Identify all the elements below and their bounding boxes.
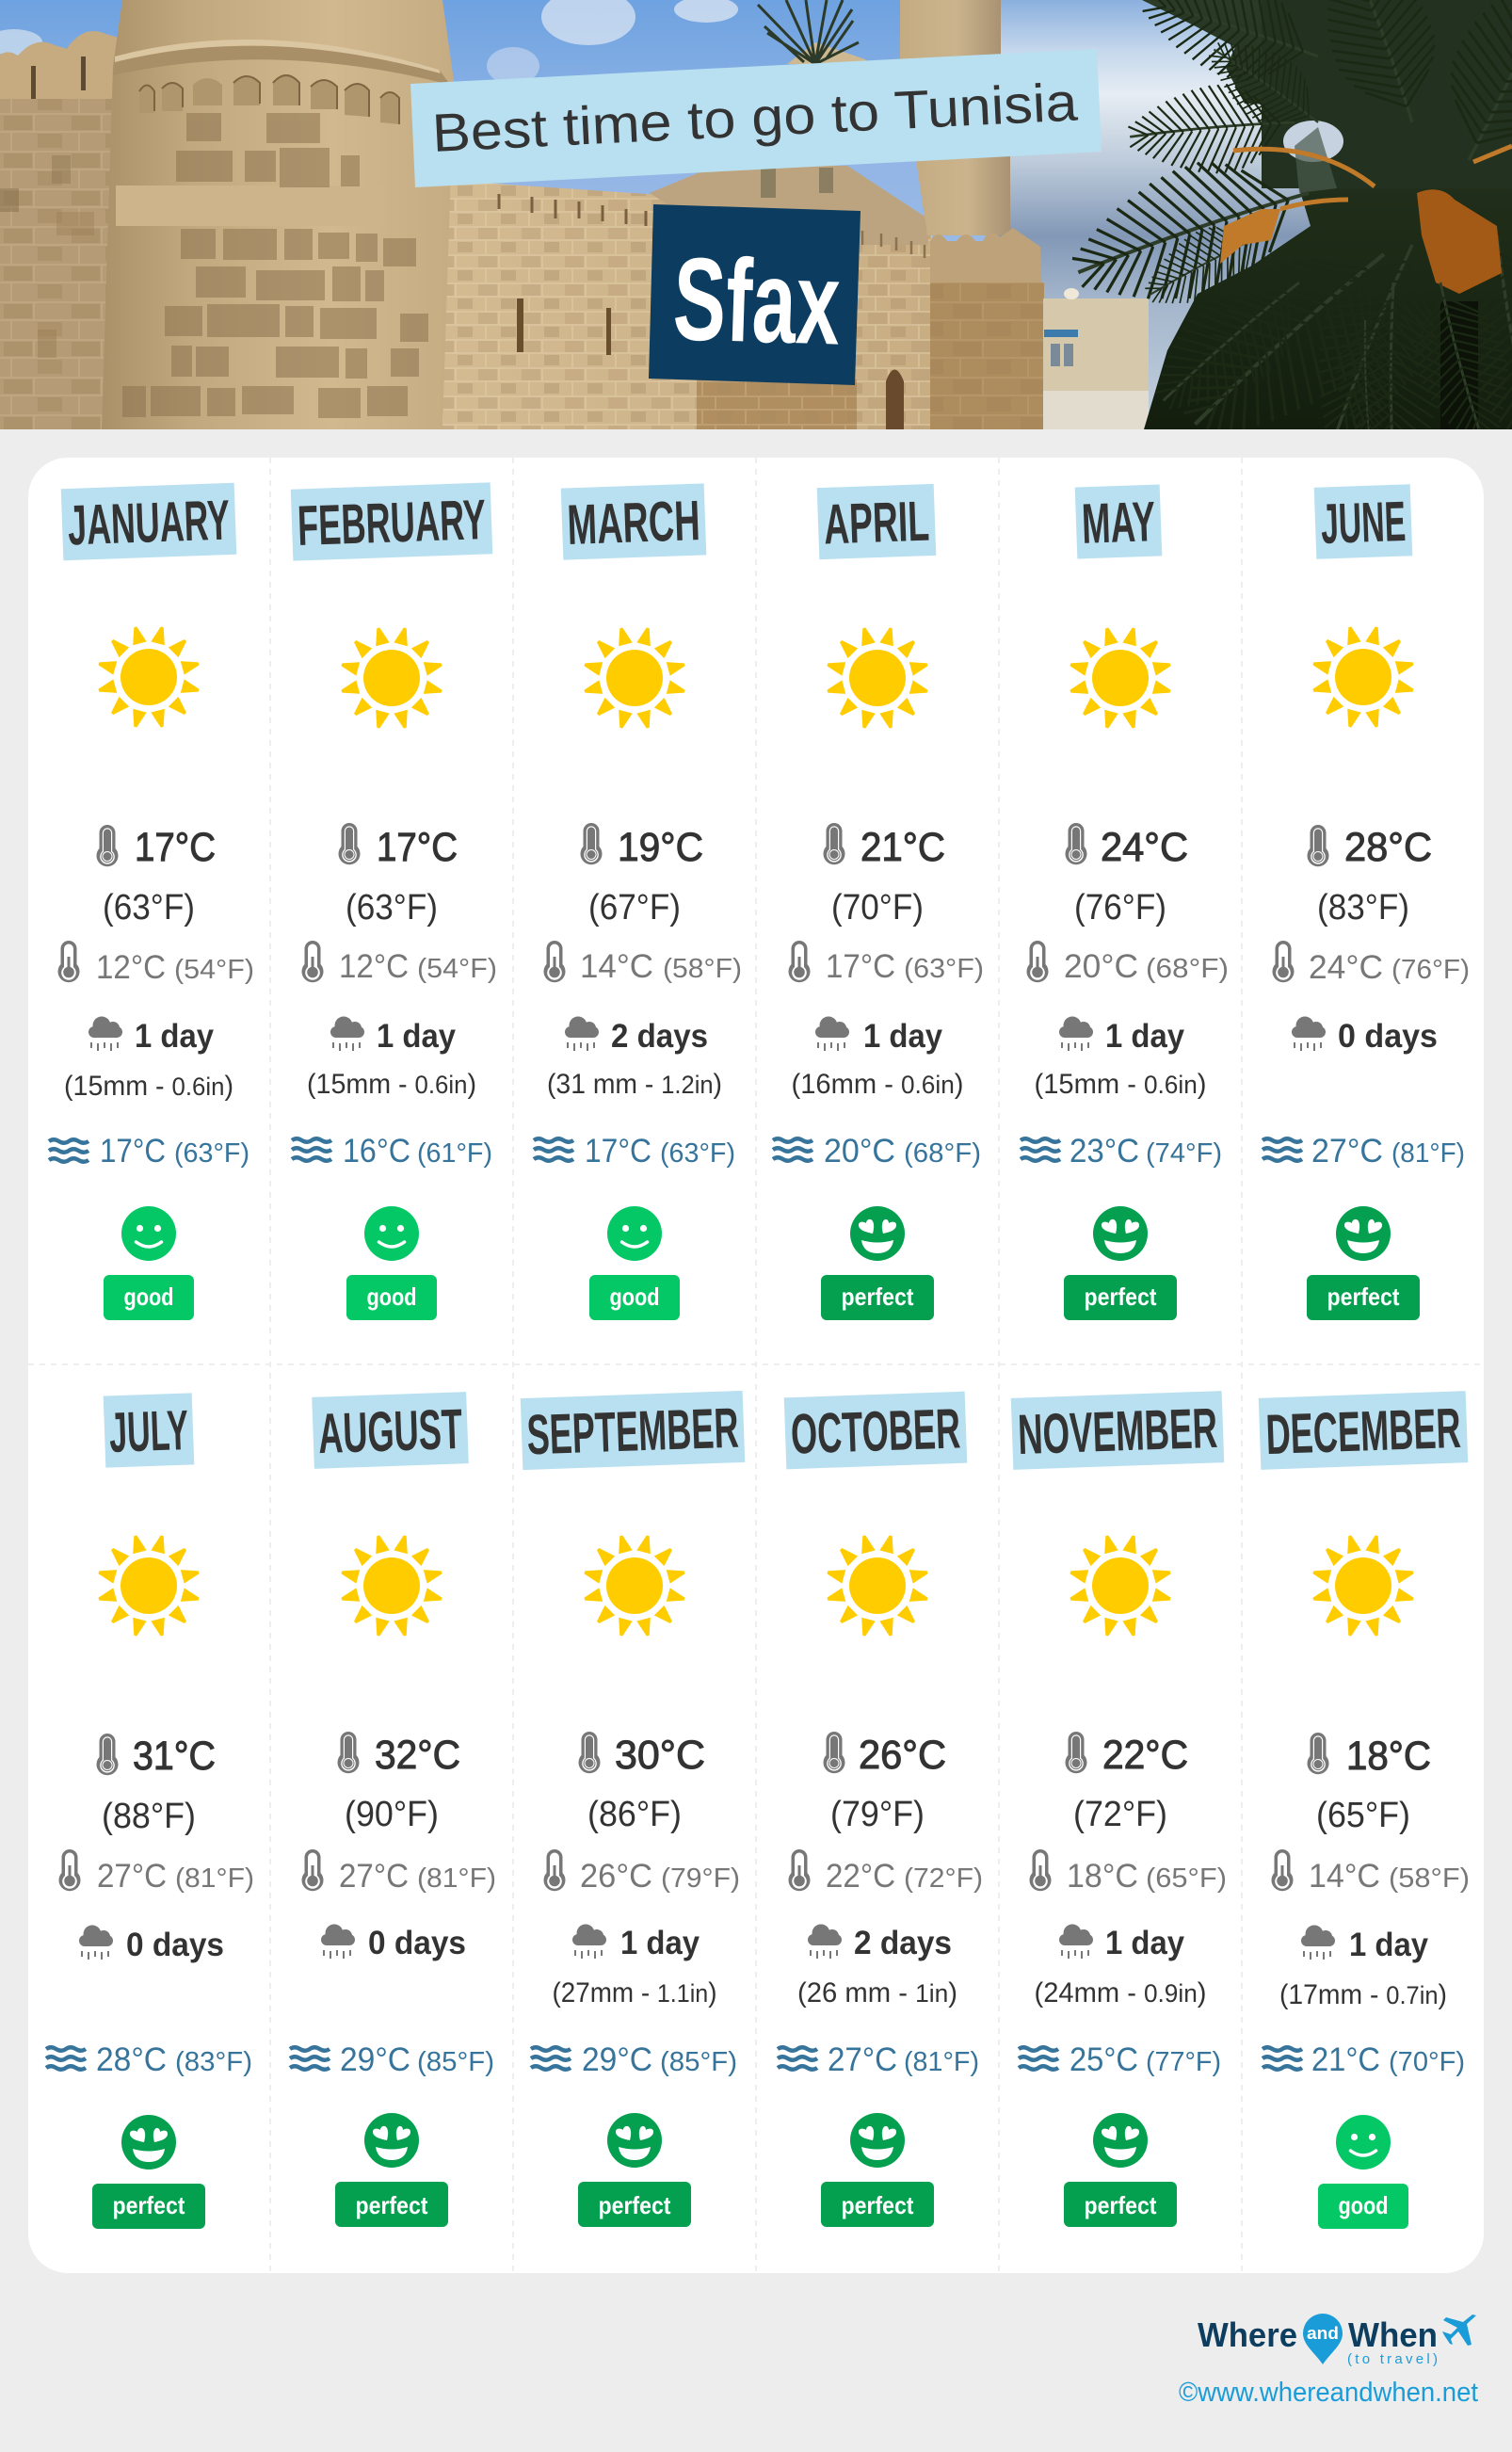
sea temperature: (81°F) [904,2047,979,2077]
icon: sun [340,626,443,730]
low temperature: (81°F) [417,1863,496,1894]
sea temperature: 29°C [582,2041,652,2078]
high temperature fahrenheit: (67°F) [588,888,681,928]
month heading [784,1392,967,1469]
low temperature: 27°C [339,1858,409,1895]
rain days [808,1925,952,1961]
sea temperature: 20°C [824,1133,895,1170]
main wall [424,179,932,429]
sea temperature: 23°C [1070,1133,1139,1170]
logo: Where and When: When [1348,2315,1438,2354]
panel: monthly calendar card [28,458,1484,2273]
month heading: JANUARY [67,489,231,557]
rainfall: (15mm - 0.6in) [64,1071,233,1102]
sea temperature: (74°F) [1146,1138,1222,1169]
low temperature: 20°C [1064,948,1138,985]
rain days: 0 days [368,1925,466,1961]
right minaret tower [900,0,1001,62]
rating: perfect [821,2113,934,2227]
sea temperature [1263,2041,1465,2078]
high temperature [1066,1732,1188,1778]
sea temperature: (68°F) [904,1138,981,1169]
sea temperature: 17°C [100,1133,166,1170]
rainfall: (24mm - 0.9in) [1035,1977,1206,2008]
rainfall: (15mm - 0.6in) [1035,1069,1206,1100]
rain days [572,1925,700,1961]
rating: perfect: perfect [1085,1282,1157,1311]
icon: map pin [1303,2314,1343,2364]
high temperature [823,823,945,870]
sea temperature: (85°F) [660,2047,737,2077]
high temperature: 17°C [377,825,458,870]
month heading: JULY [108,1398,189,1464]
column: September [521,1391,745,2227]
rain days: 1 day [135,1018,215,1055]
low temperature [1026,941,1229,985]
icon: sun [583,626,686,730]
low temperature: (79°F) [661,1863,740,1894]
low temperature: 12°C [339,948,409,985]
column: December [1259,1391,1470,2229]
high temperature [1307,1733,1431,1779]
icon: plane [1442,2315,1476,2346]
rain days: 1 day [1105,1925,1185,1961]
rain days: 0 days [126,1927,224,1963]
low temperature [58,941,254,986]
icon: sun [1069,1534,1172,1637]
high temperature fahrenheit: (72°F) [1073,1795,1167,1834]
column: March [534,483,742,1320]
sea temperature: (63°F) [660,1138,735,1169]
dates [1417,189,1502,294]
rainfall: (26 mm - 1in) [797,1977,957,2008]
rain days [565,1017,708,1055]
icon: sun [1311,1534,1415,1637]
rainfall: (16mm - 0.6in) [792,1069,963,1100]
high temperature [96,825,216,870]
sea temperature [292,1133,492,1170]
high temperature: 24°C [1101,825,1188,870]
sea temperature: (77°F) [1146,2047,1221,2077]
low temperature [789,1849,983,1895]
month heading [561,483,706,560]
low temperature: 24°C [1309,949,1383,986]
rain days [1059,1017,1185,1055]
high temperature fahrenheit: (86°F) [587,1795,682,1834]
high temperature: 30°C [615,1733,705,1778]
low temperature: (54°F) [174,955,254,985]
low temperature [1030,1849,1227,1895]
rain days: 1 day [1349,1927,1429,1963]
month heading: APRIL [823,490,930,556]
sea temperature [290,2041,494,2078]
sea temperature: (81°F) [1391,1138,1465,1169]
low temperature: (58°F) [663,954,742,984]
low temperature [544,1849,740,1895]
rain days: 1 day [377,1018,457,1055]
month heading: MAY [1081,490,1156,556]
sea temperature: 16°C [343,1133,410,1170]
icon: sun [826,626,929,730]
high temperature: 19°C [618,825,703,870]
high temperature: 31°C [133,1734,216,1779]
sea temperature: 21°C [1311,2041,1380,2078]
sea temperature: 27°C [1311,1133,1383,1170]
low temperature [301,1849,496,1895]
low temperature: (81°F) [175,1863,254,1894]
rainfall: (15mm - 0.6in) [307,1069,476,1100]
month heading [104,1393,194,1468]
month heading [61,483,236,560]
rating: perfect: perfect [842,1282,914,1311]
low temperature: 27°C [97,1858,167,1895]
central palm frond [787,42,866,64]
rating: perfect [578,2113,691,2227]
month heading [1011,1391,1224,1470]
high temperature fahrenheit: (76°F) [1074,888,1166,928]
high temperature: 28°C [1344,825,1432,870]
low temperature [1273,941,1470,986]
rating: perfect [335,2113,448,2227]
sea temperature: (70°F) [1389,2047,1465,2077]
month heading: FEBRUARY [297,488,487,557]
hero photo: Sfax ramparts and palm [0,0,1512,476]
icon: sun [1069,626,1172,730]
low temperature: (76°F) [1391,955,1470,985]
high temperature fahrenheit: (79°F) [830,1795,925,1834]
sea temperature [531,2041,737,2078]
city banner [649,204,861,385]
month heading: MARCH [566,489,701,557]
rain days [321,1925,466,1961]
month heading: AUGUST [317,1397,463,1465]
low temperature [789,941,984,985]
month heading [1075,484,1162,559]
month heading: NOVEMBER [1017,1396,1218,1466]
column: April [773,484,984,1320]
title banner [410,49,1102,187]
rating: perfect: perfect [842,2191,914,2219]
low temperature: 22°C [826,1858,895,1895]
icon: sun [340,1534,443,1637]
icon: sun [97,1534,201,1637]
sea temperature [46,2041,252,2078]
high temperature: 32°C [375,1733,460,1778]
high temperature: 26°C [859,1733,946,1778]
low temperature [1271,1849,1470,1895]
high temperature fahrenheit: (63°F) [346,888,438,928]
high temperature [1307,825,1432,870]
rainfall: (17mm - 0.7in) [1279,1979,1447,2010]
sea temperature: 27°C [828,2041,897,2078]
tower arches [139,75,399,124]
logo: Where and When: Where [1198,2315,1297,2354]
sea temperature: (83°F) [175,2047,252,2077]
rating: perfect: perfect [1327,1282,1400,1311]
sea temperature: 28°C [96,2041,167,2078]
city name: Sfax [671,234,842,370]
month heading [521,1391,745,1470]
sea temperature [1019,2041,1221,2078]
column: February [291,482,497,1320]
column: October [778,1392,983,2227]
low temperature: (65°F) [1146,1863,1227,1894]
rating: perfect [1064,1206,1177,1320]
sea temperature: (63°F) [174,1138,249,1169]
rain days [1301,1925,1429,1963]
rating: good [1318,2115,1408,2229]
low temperature [301,941,497,985]
rain days: 1 day [1105,1018,1185,1055]
sea temperature: 17°C [585,1133,651,1170]
sea temperature: (85°F) [417,2047,494,2077]
icon: map pin: and [1307,2324,1339,2343]
column: January [49,483,254,1320]
sea temperature [534,1133,735,1170]
rating: good: good [610,1282,659,1311]
logo: Where and When: (to travel) [1347,2351,1438,2367]
rain days: 1 day [863,1018,943,1055]
low temperature: (68°F) [1146,954,1229,984]
rating: good: good [367,1282,416,1311]
high temperature fahrenheit: (65°F) [1316,1796,1410,1835]
rain days: 1 day [620,1925,700,1961]
low temperature [544,941,742,985]
white building [1043,298,1149,391]
low temperature: 17°C [826,948,895,985]
rating: perfect: perfect [113,2191,185,2219]
column: November [1011,1391,1227,2227]
rating: good [346,1206,437,1320]
rainfall: (27mm - 1.1in) [552,1977,717,2008]
low temperature: (72°F) [904,1863,983,1894]
rating: perfect: perfect [1085,2191,1157,2219]
icon: sun [826,1534,929,1637]
rating: perfect [1307,1206,1420,1320]
rain days [815,1017,943,1055]
sea temperature [1263,1133,1465,1170]
sea temperature [778,2041,979,2078]
copyright url: ©www.whereandwhen.net [1179,2378,1478,2408]
title text: Best time to go to Tunisia [431,73,1079,164]
low temperature: (63°F) [904,954,984,984]
rain days [330,1017,457,1055]
rating: good: good [1339,2191,1388,2219]
high temperature fahrenheit: (70°F) [831,888,924,928]
high temperature fahrenheit: (90°F) [345,1795,439,1834]
month heading [1314,484,1412,559]
rating: perfect: perfect [599,2191,671,2219]
high temperature fahrenheit: (63°F) [103,888,195,928]
month heading: OCTOBER [790,1396,961,1466]
high temperature: 17°C [135,825,216,870]
month heading: SEPTEMBER [525,1396,740,1466]
column: May [1021,484,1229,1320]
rain days: 2 days [854,1925,952,1961]
rain days [88,1017,215,1055]
month heading [291,482,492,561]
low temperature [58,1849,254,1895]
low temperature: 26°C [580,1858,652,1895]
high temperature [96,1734,216,1779]
column: June [1263,484,1470,1320]
rain days [1292,1017,1438,1055]
high temperature [337,1732,460,1778]
column: July [46,1393,254,2229]
rain days [79,1925,224,1963]
sea temperature: 25°C [1070,2041,1138,2078]
rain days: 2 days [611,1018,708,1055]
sea temperature [1021,1133,1222,1170]
sea temperature: 29°C [340,2041,410,2078]
high temperature fahrenheit: (88°F) [102,1797,196,1836]
icon: sun [583,1534,686,1637]
high temperature [578,1732,705,1778]
rating: good [589,1206,680,1320]
high temperature [580,823,703,870]
high temperature [1066,823,1188,870]
high temperature [823,1732,946,1778]
rating: perfect [1064,2113,1177,2227]
rating: perfect: perfect [356,2191,428,2219]
tower dark stones [122,113,428,418]
logo: Where and When [1198,2314,1476,2367]
icon: sun [1311,625,1415,729]
rating: good [104,1206,194,1320]
date palm mass [1142,0,1512,429]
low temperature: 14°C [580,948,653,985]
low temperature: 14°C [1309,1858,1380,1895]
column: August [290,1392,496,2227]
rating: perfect [821,1206,934,1320]
rain days [1059,1925,1185,1961]
month heading [817,484,936,559]
month heading: JUNE [1320,490,1407,556]
sea temperature: (61°F) [417,1138,492,1169]
high temperature: 21°C [861,825,945,870]
month heading [312,1392,469,1469]
rainfall: (31 mm - 1.2in) [547,1069,722,1100]
high temperature: 22°C [1102,1733,1188,1778]
low temperature: 12°C [96,949,166,986]
low temperature: 18°C [1067,1858,1138,1895]
rain days: 0 days [1338,1018,1438,1055]
round tower [102,0,454,429]
high temperature [339,823,458,870]
high temperature fahrenheit: (83°F) [1317,888,1409,928]
low temperature: (58°F) [1389,1863,1470,1894]
rating: perfect [92,2115,205,2229]
sea temperature [773,1133,981,1170]
rating: good: good [124,1282,173,1311]
left rampart [0,31,122,429]
icon: sun [97,625,201,729]
low temperature: (54°F) [417,954,497,984]
high temperature: 18°C [1346,1734,1431,1779]
sea temperature [49,1133,249,1170]
